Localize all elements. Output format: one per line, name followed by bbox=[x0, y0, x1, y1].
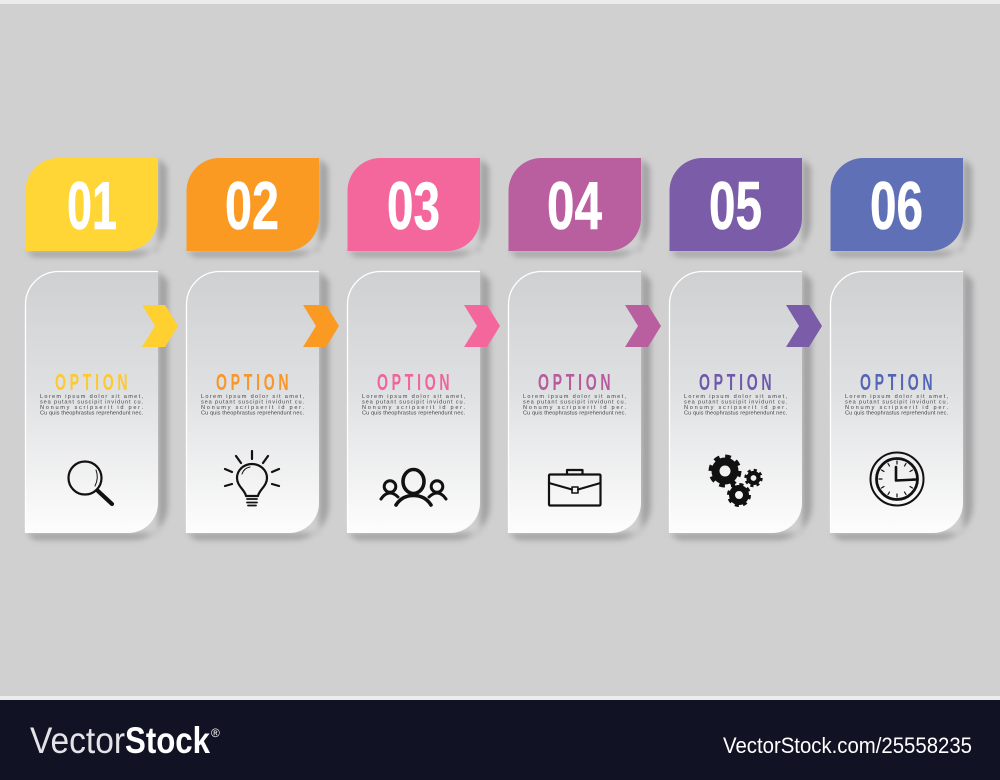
body text 4: Cu quis theophrastus reprehendunt nec. bbox=[523, 410, 626, 416]
heading option 3: OPTION bbox=[377, 369, 453, 396]
tab 03 shadow bbox=[347, 158, 489, 257]
body text 6 bbox=[845, 394, 948, 416]
body text 1: Nonumy scripserit id per. bbox=[40, 405, 143, 411]
body text 5: Cu quis theophrastus reprehendunt nec. bbox=[684, 410, 787, 416]
chevron 3 bbox=[464, 305, 500, 347]
column 1 bbox=[25, 158, 178, 540]
image id: VectorStock.com/25558235 bbox=[723, 733, 972, 758]
heading option 5: OPTION bbox=[699, 369, 775, 396]
card 6 shadow bbox=[830, 271, 973, 540]
column 2 bbox=[186, 158, 339, 540]
chevron 1 bbox=[142, 305, 178, 347]
number 05: 05 bbox=[709, 168, 762, 244]
body text 6: Lorem ipsum dolor sit amet, bbox=[845, 394, 948, 400]
body text 2: Lorem ipsum dolor sit amet, bbox=[201, 394, 304, 400]
icon: briefcase bbox=[549, 470, 600, 506]
body text 4: Nonumy scripserit id per. bbox=[523, 405, 626, 411]
body text 5: sea putant suscipit invidunt cu. bbox=[684, 400, 787, 406]
logo VectorStock: ® bbox=[211, 726, 220, 740]
card 6 bbox=[830, 272, 963, 533]
card 1 shadow bbox=[25, 271, 168, 540]
column 5 bbox=[669, 158, 822, 540]
number 06: 06 bbox=[870, 168, 923, 244]
icon: gears bbox=[710, 456, 762, 506]
body text 1: Lorem ipsum dolor sit amet, bbox=[40, 394, 143, 400]
logo VectorStock: Vector bbox=[30, 720, 125, 761]
body text 3: Cu quis theophrastus reprehendunt nec. bbox=[362, 410, 465, 416]
number tab 03 bbox=[348, 158, 480, 251]
body text 4 bbox=[523, 394, 626, 416]
body text 2: Nonumy scripserit id per. bbox=[201, 405, 304, 411]
body text 3: Lorem ipsum dolor sit amet, bbox=[362, 394, 465, 400]
body text 5: Lorem ipsum dolor sit amet, bbox=[684, 394, 787, 400]
number tab 05 bbox=[670, 158, 802, 251]
column 6 bbox=[830, 158, 973, 540]
card 3 shadow bbox=[347, 271, 490, 540]
body text 6: Nonumy scripserit id per. bbox=[845, 405, 948, 411]
number tab 02 bbox=[186, 158, 319, 251]
body text 2: Cu quis theophrastus reprehendunt nec. bbox=[201, 410, 304, 416]
heading option 6: OPTION bbox=[860, 369, 936, 396]
footer bar bbox=[0, 700, 1000, 780]
card 1 bbox=[26, 272, 158, 533]
body text 2 bbox=[201, 394, 304, 416]
chevron 5 bbox=[786, 305, 822, 347]
body text 1 bbox=[40, 394, 143, 416]
body text 1: sea putant suscipit invidunt cu. bbox=[40, 400, 143, 406]
icon: magnifier bbox=[68, 462, 112, 504]
column 4 bbox=[508, 158, 661, 540]
tab 06 shadow bbox=[830, 158, 972, 257]
heading option 1: OPTION bbox=[55, 369, 131, 396]
number 01: 01 bbox=[67, 168, 117, 244]
logo VectorStock: Stock bbox=[125, 720, 210, 761]
body text 3: sea putant suscipit invidunt cu. bbox=[362, 400, 465, 406]
chevron 4 bbox=[625, 305, 661, 347]
body text 6: sea putant suscipit invidunt cu. bbox=[845, 400, 948, 406]
number tab 06 bbox=[830, 158, 963, 251]
number tab 01 bbox=[26, 158, 158, 251]
card 2 bbox=[186, 272, 319, 533]
tab 04 shadow bbox=[508, 158, 650, 257]
body text 2: sea putant suscipit invidunt cu. bbox=[201, 400, 304, 406]
tab 01 shadow bbox=[25, 158, 167, 257]
body text 3: Nonumy scripserit id per. bbox=[362, 405, 465, 411]
number tab 04 bbox=[508, 158, 641, 251]
card 5 shadow bbox=[669, 271, 812, 540]
chevron 2 bbox=[303, 305, 339, 347]
body text 5: Nonumy scripserit id per. bbox=[684, 405, 787, 411]
number 03: 03 bbox=[387, 168, 440, 244]
body text 4: sea putant suscipit invidunt cu. bbox=[523, 400, 626, 406]
body text 1: Cu quis theophrastus reprehendunt nec. bbox=[40, 410, 143, 416]
body text 6: Cu quis theophrastus reprehendunt nec. bbox=[845, 410, 948, 416]
tab 02 shadow bbox=[186, 158, 328, 257]
card 4 bbox=[508, 272, 641, 533]
number 02: 02 bbox=[225, 168, 279, 244]
heading option 4: OPTION bbox=[538, 369, 614, 396]
card 4 shadow bbox=[508, 271, 651, 540]
card 2 shadow bbox=[186, 271, 329, 540]
card 3 bbox=[348, 272, 480, 533]
heading option 2: OPTION bbox=[216, 369, 292, 396]
number 04: 04 bbox=[547, 168, 602, 244]
body text 4: Lorem ipsum dolor sit amet, bbox=[523, 394, 626, 400]
tab 05 shadow bbox=[669, 158, 811, 257]
column 3 bbox=[347, 158, 500, 540]
icon: clock bbox=[870, 452, 924, 506]
body text 3 bbox=[362, 394, 465, 416]
card 5 bbox=[670, 272, 802, 533]
icon: light bulb bbox=[225, 451, 279, 506]
body text 5 bbox=[684, 394, 787, 416]
logo VectorStock bbox=[30, 720, 220, 761]
icon: people bbox=[381, 470, 446, 505]
